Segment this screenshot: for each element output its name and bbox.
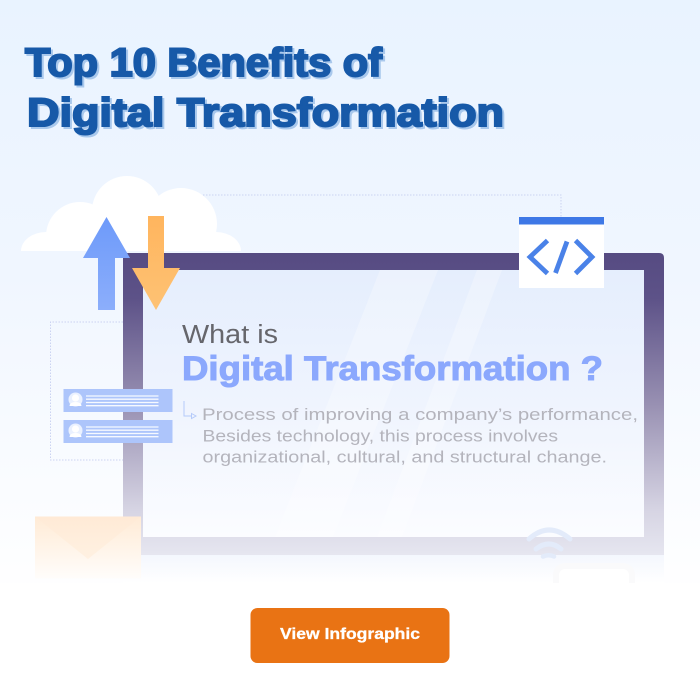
heading: what is: What is	[182, 321, 278, 349]
code window	[519, 217, 604, 288]
title text: Digital Transformation	[27, 91, 504, 135]
icon: wifi	[529, 530, 570, 556]
title	[25, 41, 506, 137]
button	[250, 608, 450, 663]
description: organizational, cultural, and structural change.	[202, 448, 607, 466]
chat card 1	[64, 389, 172, 412]
monitor	[123, 253, 664, 583]
monitor base fade	[123, 555, 664, 583]
icon: envelope	[35, 516, 141, 578]
dashed connector: left	[50, 322, 123, 460]
envelope flap	[35, 516, 141, 559]
icon: avatar	[68, 424, 82, 438]
monitor screen	[143, 270, 644, 537]
title shadow: Top 10 Benefits of	[27, 43, 385, 87]
icon: code brackets	[530, 240, 592, 274]
icon: small arrow	[184, 401, 196, 418]
description	[202, 405, 638, 466]
chat card 2	[64, 420, 172, 443]
icon: avatar	[68, 392, 82, 406]
phone outline	[556, 566, 632, 596]
window body	[519, 217, 604, 288]
title text	[25, 41, 504, 135]
screen glare	[275, 270, 502, 537]
heading: digital transformation: Digital Transformation ?	[182, 350, 603, 388]
button background	[250, 608, 450, 663]
button label: View Infographic	[280, 626, 420, 643]
arrow: down	[132, 216, 180, 310]
text lines	[86, 396, 158, 406]
arrow: up	[83, 217, 130, 310]
window title bar	[519, 217, 604, 224]
title shadow: Digital Transformation	[29, 93, 506, 137]
icon: cloud	[21, 176, 241, 251]
title shadow	[27, 43, 506, 137]
text lines	[86, 427, 158, 437]
dashed connector: top	[203, 195, 561, 217]
description: Process of improving a company’s performance,	[202, 405, 638, 424]
title text: Top 10 Benefits of	[25, 41, 383, 85]
bottom white fade	[0, 583, 700, 700]
description: Besides technology, this process involves	[202, 426, 558, 446]
monitor frame	[123, 253, 664, 555]
